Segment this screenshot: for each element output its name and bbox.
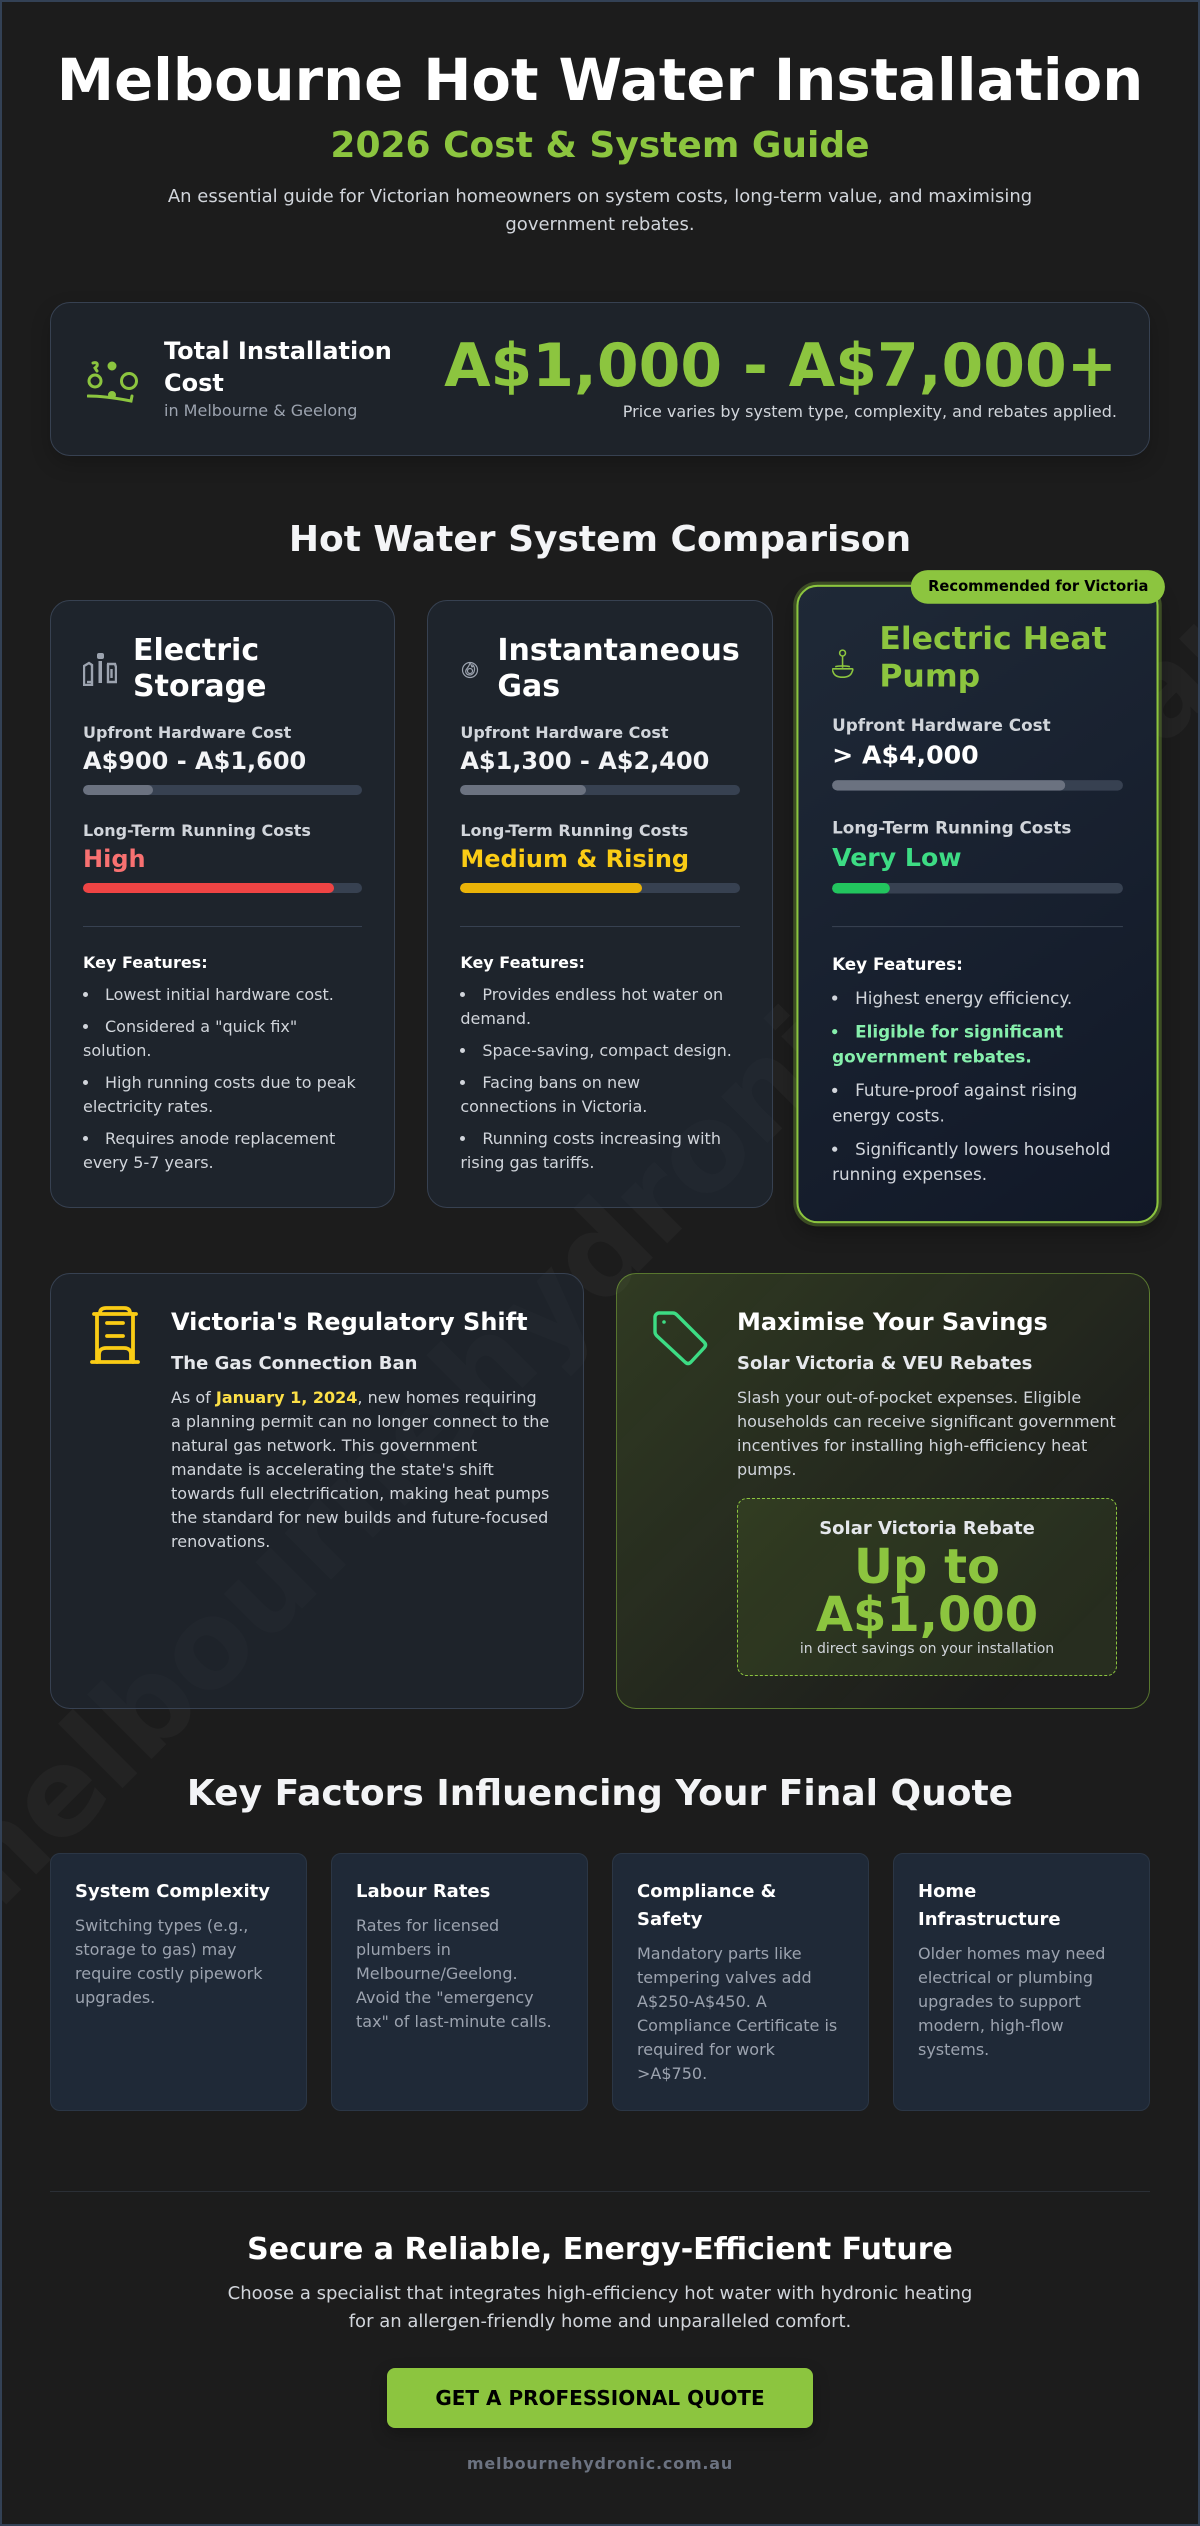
upfront cost: Upfront Hardware Cost xyxy=(83,723,291,742)
key features: Key Features: xyxy=(83,953,208,972)
key features xyxy=(832,926,1123,1188)
running costs: High xyxy=(83,845,146,873)
regulatory text: The Gas Connection Ban xyxy=(171,1353,417,1374)
regulatory text: Victoria's Regulatory Shift xyxy=(171,1308,528,1336)
panel: compliance and safety: Compliance & Safety xyxy=(637,1881,776,1930)
panel: electric storage xyxy=(50,600,395,1208)
key features: Highest energy efficiency. xyxy=(855,988,1072,1008)
badge: recommended: Recommended for Victoria xyxy=(928,579,1148,595)
panel: labour rates: Labour Rates xyxy=(356,1881,490,1902)
upfront cost xyxy=(832,715,1123,791)
call to action text: Choose a specialist that integrates high-efficiency hot water with hydronic heating for an allergen-friendly home and unparalleled comfort. xyxy=(228,2283,972,2332)
upfront cost: A$1,300 - A$2,400 xyxy=(460,747,709,775)
badge: recommended xyxy=(911,570,1165,604)
card title: Electric Storage xyxy=(133,633,266,704)
savings text xyxy=(737,1308,1117,1676)
upfront cost: A$900 - A$1,600 xyxy=(83,747,306,775)
panel: labour rates: Rates for licensed plumbers in Melbourne/Geelong. Avoid the "emergency tax" of last-minute calls. xyxy=(356,1916,552,2031)
key features: Key Features: xyxy=(460,953,585,972)
callout: rebate xyxy=(737,1498,1117,1676)
key features: Space-saving, compact design. xyxy=(482,1041,732,1060)
key features: Significantly lowers household running expenses. xyxy=(832,1139,1110,1184)
panel: regulatory shift xyxy=(50,1273,584,1709)
subtitle: 2026 Cost & System Guide xyxy=(330,125,870,166)
running costs: Long-Term Running Costs xyxy=(832,818,1071,838)
panel: electric heat pump xyxy=(796,585,1159,1223)
upfront cost xyxy=(83,723,362,795)
callout: rebate: Solar Victoria Rebate xyxy=(819,1518,1035,1539)
panel: compliance and safety: Mandatory parts like tempering valves add A$250-A$450. A Compliance Certificate is required for work >A$750. xyxy=(637,1944,837,2083)
key features: Eligible for significant government rebates. xyxy=(832,1022,1063,1067)
running costs xyxy=(460,821,740,893)
heading: comparison: Hot Water System Comparison xyxy=(289,519,911,560)
running costs: Medium & Rising xyxy=(460,845,689,873)
title: Melbourne Hot Water Installation xyxy=(57,47,1143,114)
heading: call to action: Secure a Reliable, Energy-Efficient Future xyxy=(247,2232,953,2267)
panel: system complexity: System Complexity xyxy=(75,1881,270,1902)
running costs: Long-Term Running Costs xyxy=(460,821,688,840)
savings text: Solar Victoria & VEU Rebates xyxy=(737,1353,1032,1374)
key features xyxy=(460,926,740,1175)
key features: Considered a "quick fix" solution. xyxy=(83,1017,297,1060)
upfront cost: Upfront Hardware Cost xyxy=(460,723,669,742)
upfront cost: > A$4,000 xyxy=(832,740,978,770)
callout: rebate: Up to A$1,000 xyxy=(816,1539,1038,1643)
panel: system complexity xyxy=(50,1853,307,2111)
panel: total installation cost xyxy=(50,302,1150,456)
icon: pipes and valves xyxy=(87,361,138,403)
button: get a quote: GET A PROFESSIONAL QUOTE xyxy=(435,2386,765,2410)
panel: home infrastructure: Home Infrastructure xyxy=(918,1881,1061,1930)
card title: Instantaneous Gas xyxy=(497,633,740,704)
regulatory text xyxy=(171,1308,549,1551)
savings text: Slash your out-of-pocket expenses. Eligible households can receive significant government incentives for installing high-efficiency heat pumps. xyxy=(737,1388,1116,1479)
icon: price tag xyxy=(653,1311,708,1366)
card title: Electric Heat Pump xyxy=(879,621,1106,695)
key features xyxy=(83,926,362,1175)
key features: Future-proof against rising energy costs. xyxy=(832,1080,1077,1126)
key features: Requires anode replacement every 5-7 years. xyxy=(83,1129,335,1172)
cost label: in Melbourne & Geelong xyxy=(164,401,357,420)
panel: savings xyxy=(616,1273,1150,1709)
panel: compliance and safety xyxy=(612,1853,869,2111)
panel: labour rates xyxy=(331,1853,588,2111)
savings text: Maximise Your Savings xyxy=(737,1308,1048,1336)
panel: home infrastructure: Older homes may need electrical or plumbing upgrades to support modern, high-flow systems. xyxy=(918,1944,1105,2059)
regulatory text: As of January 1, 2024, new homes requiring a planning permit can no longer connect to the natural gas network. This government mandate is accelerating the state's shift towards full electrification, making heat pumps the standard for new builds and future-focused renovations. xyxy=(171,1388,549,1551)
panel: instantaneous gas xyxy=(427,600,773,1208)
icon: gas heater xyxy=(90,1306,140,1364)
cost value: A$1,000 - A$7,000+ xyxy=(444,331,1117,401)
heading: key factors: Key Factors Influencing Your Final Quote xyxy=(187,1773,1013,1814)
key features: Running costs increasing with rising gas tariffs. xyxy=(460,1129,721,1172)
cost label: Total Installation Cost xyxy=(164,337,392,397)
callout: rebate: in direct savings on your installation xyxy=(800,1641,1054,1657)
cost value: Price varies by system type, complexity, and rebates applied. xyxy=(623,402,1117,421)
running costs xyxy=(832,818,1123,894)
website: melbournehydronic.com.au xyxy=(467,2454,733,2473)
intro text: An essential guide for Victorian homeowners on system costs, long-term value, and maximising government rebates. xyxy=(168,186,1032,234)
upfront cost xyxy=(460,723,740,795)
key features: Key Features: xyxy=(832,954,963,974)
running costs xyxy=(83,821,362,893)
button: get a quote xyxy=(387,2368,813,2428)
running costs: Long-Term Running Costs xyxy=(83,821,311,840)
key features: Facing bans on new connections in Victoria. xyxy=(460,1073,647,1116)
key features: Provides endless hot water on demand. xyxy=(460,985,723,1028)
key features: Lowest initial hardware cost. xyxy=(105,985,334,1004)
panel: system complexity: Switching types (e.g., storage to gas) may require costly pipework upgrades. xyxy=(75,1916,262,2007)
key features: High running costs due to peak electricity rates. xyxy=(83,1073,356,1116)
panel: home infrastructure xyxy=(893,1853,1150,2111)
upfront cost: Upfront Hardware Cost xyxy=(832,715,1050,735)
running costs: Very Low xyxy=(832,843,961,872)
